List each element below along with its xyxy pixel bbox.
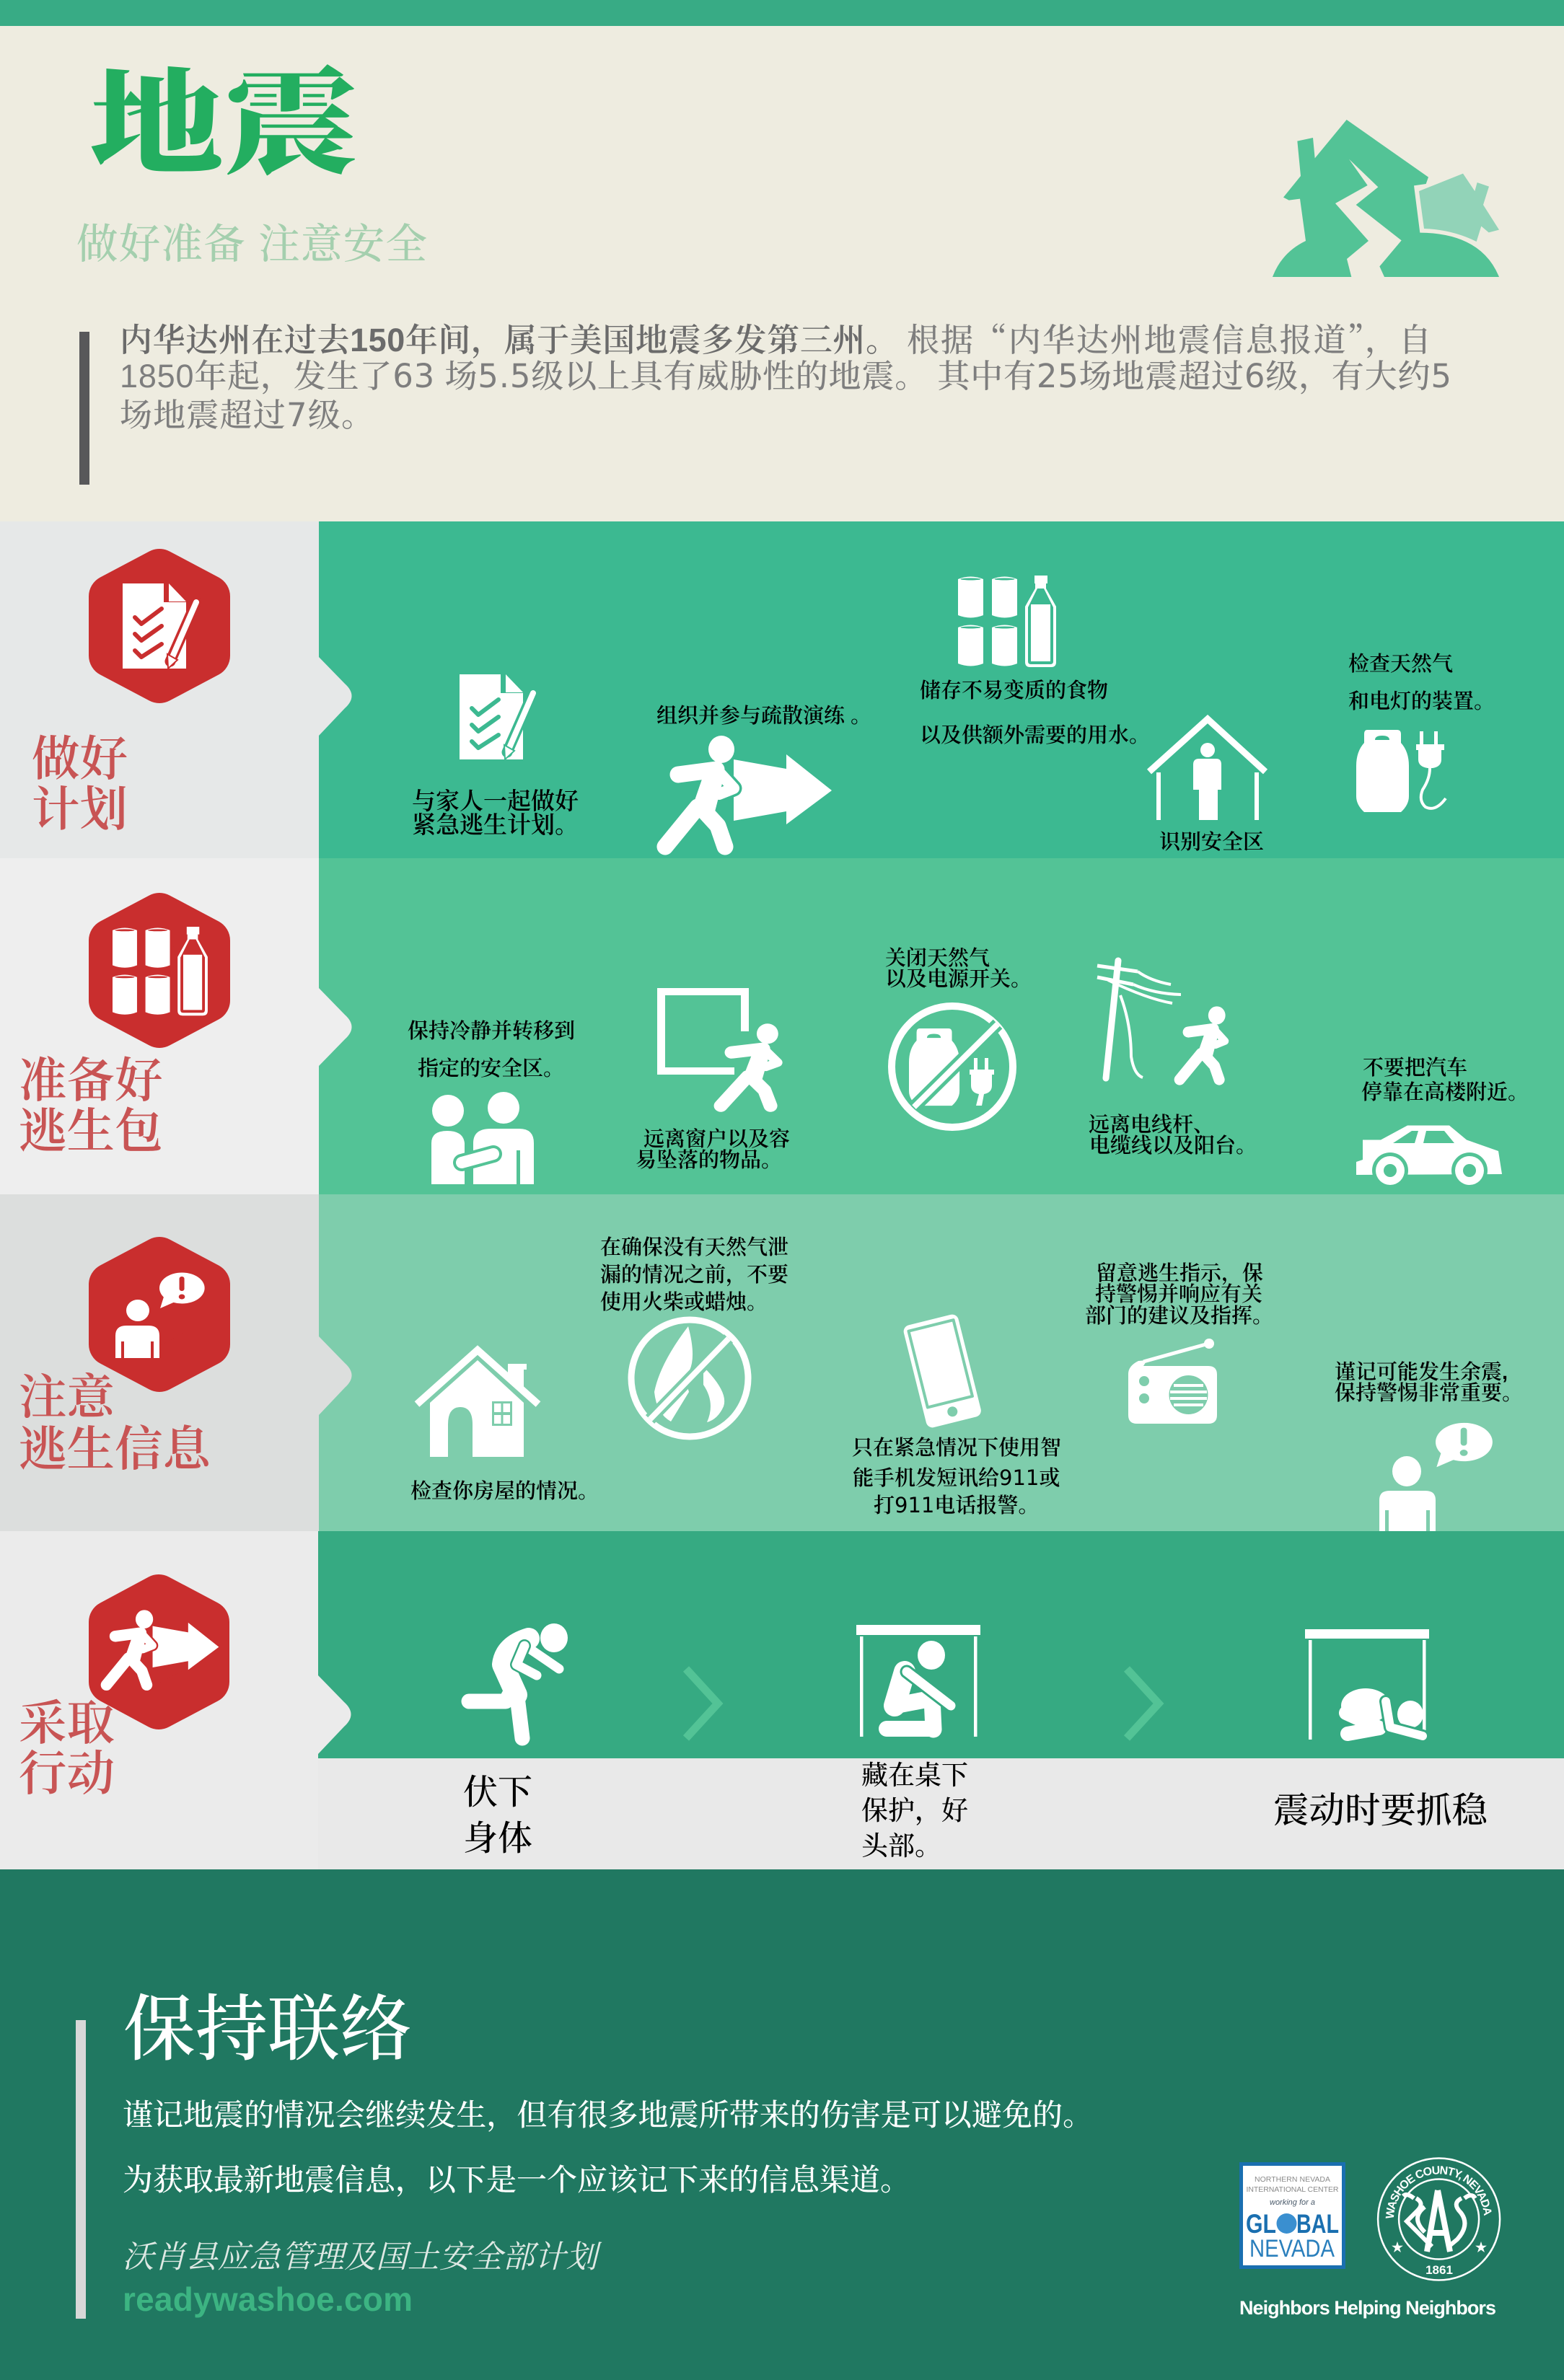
tagline: Neighbors Helping Neighbors [1239,2297,1496,2319]
heading: make a plan: 计划 [32,783,128,837]
icon: car [1356,1125,1502,1189]
icon: runner with arrow [665,736,832,847]
text: windows: 远离窗户以及容 [643,1127,790,1151]
icon: cans and bottle [958,576,1056,667]
panel background right [319,858,1564,1194]
notch [319,1336,352,1415]
panel: stay in touch footer [0,1869,1564,2380]
arrow: chevron [1127,1669,1159,1738]
heading: take action [19,1697,115,1801]
text: no matches: 漏的情况之前，不要 [600,1263,788,1287]
text: car parking: 不要把汽车 [1363,1056,1467,1080]
title: 地震 [89,60,358,189]
logo: washoe county seal: ★ [1391,2241,1404,2255]
caption strip [318,1758,1564,1869]
text: shut off gas: 关闭天然气 [885,946,990,970]
text: shut off gas: 以及电源开关。 [885,967,1032,991]
text: food and water: 储存不易变质的食物 [920,679,1108,702]
text: follow instructions: 持警惕并响应有关 [1095,1282,1262,1306]
text: food and water [920,679,1150,747]
text: shut off gas [885,946,1032,991]
heading: take action: 采取 [19,1697,115,1750]
heading: stay informed: 逃生信息 [19,1423,212,1476]
icon: utility pole and runner [1097,961,1226,1080]
icon: smartphone [902,1313,983,1429]
logo: global nevada: working for a [1270,2198,1315,2207]
intro paragraph: 内华达州在过去150年间，属于美国地震多发第三州。 [120,322,898,358]
intro accent bar [79,332,89,485]
text: power lines [1089,1113,1257,1158]
text: program: 沃肖县应急管理及国土安全部计划 [123,2240,602,2275]
text: stay calm: 指定的安全区。 [418,1057,564,1080]
text: power lines: 远离电线杆、 [1089,1113,1214,1137]
text: aftershocks: 保持警惕非常重要。 [1335,1381,1523,1405]
heading: stay informed: 注意 [19,1371,115,1424]
icon: cover under table [856,1625,980,1737]
panel: take action [0,1531,1564,1869]
icon: person with alert bubble [1379,1423,1493,1531]
heading: stay in touch: 保持联络 [123,1989,412,2070]
panel: prepare a kit [0,858,1564,1194]
heading: make a plan [32,733,128,837]
arrow: chevron [686,1669,718,1738]
logo: global nevada [1239,2162,1345,2269]
heading: prepare a kit: 逃生包 [19,1105,163,1158]
heading: stay informed [19,1371,212,1476]
heading: take action: 行动 [19,1747,115,1801]
panel background right [319,521,1564,858]
text: follow instructions [1085,1261,1273,1328]
text: check home: 检查你房屋的情况。 [410,1479,599,1503]
icon: hold on under table [1305,1629,1429,1740]
text: use smartphone: 只在紧急情况下使用智 [852,1436,1061,1460]
subtitle: 做好准备 注意安全 [76,221,427,268]
text: hold on: 震动时要抓稳 [1273,1791,1489,1830]
link: readywashoe: readywashoe.com [123,2280,413,2318]
text: cover: 藏在桌下 [861,1760,968,1790]
icon: safe zone house [1149,719,1265,820]
heading: make a plan: 做好 [32,733,128,786]
text: no matches [600,1235,788,1314]
icon: hexagon plan [110,570,208,682]
icon: hexagon person [110,1259,208,1370]
panel background left [0,858,319,1194]
heading: prepare a kit [19,1054,163,1158]
notch [319,657,352,736]
text: car parking: 停靠在高楼附近。 [1361,1080,1529,1104]
text: damage avoidable: 谨记地震的情况会继续发生，但有很多地震所带来的伤害是可以避免的。 [123,2098,1093,2133]
text: cover: 头部。 [861,1831,941,1861]
icon: cracked house [1273,120,1499,277]
icon: hexagon runner [106,1596,219,1708]
intro paragraph [120,314,1451,434]
icon: checklist [460,674,533,759]
logo: washoe county seal [1376,2157,1501,2281]
panel background left [0,1194,319,1531]
icon: drop [469,1623,568,1738]
text: safe zone: 识别安全区 [1159,830,1264,854]
text: stay calm: 保持冷静并转移到 [408,1019,575,1043]
icon: house [417,1350,538,1457]
text: drills: 组织并参与疏散演练 。 [656,704,871,728]
logo: global nevada: BAL [1296,2209,1339,2239]
text: power lines: 电缆线以及阳台。 [1089,1134,1257,1158]
logo: global nevada: GL [1246,2209,1276,2239]
text: cover: 保护，好 [861,1796,968,1825]
text: plan with family [412,788,579,838]
text: gas and lights: 和电灯的装置。 [1348,689,1495,713]
text: drop: 身体 [463,1820,532,1858]
text: windows: 易坠落的物品。 [636,1148,782,1172]
panel background left [0,1531,319,1869]
text: follow instructions: 部门的建议及指挥。 [1085,1303,1273,1328]
footer accent bar [76,2020,86,2319]
text: drop [463,1773,532,1858]
logo: global nevada: NEVADA [1249,2235,1335,2262]
logo: global nevada: INTERNATIONAL CENTER [1247,2185,1339,2194]
panel: make a plan [0,521,1564,858]
panel background right [319,1194,1564,1531]
panel background left [0,521,319,858]
text: cover [861,1760,968,1861]
text: windows [636,1127,790,1172]
text: aftershocks: 谨记可能发生余震, [1335,1360,1508,1384]
notch [319,988,352,1066]
text: follow instructions: 留意逃生指示，保 [1096,1261,1263,1285]
text: aftershocks [1335,1360,1523,1405]
heading: prepare a kit: 准备好 [19,1054,163,1108]
text: gas and lights [1348,652,1495,713]
panel background right [318,1531,1564,1758]
text: plan with family: 紧急逃生计划。 [412,811,579,838]
logo: washoe county seal: ★ [1475,2241,1488,2255]
text: food and water: 以及供额外需要的用水。 [920,723,1150,747]
text: use smartphone: 打911电话报警。 [874,1493,1039,1517]
logo: washoe county seal: WASHOE COUNTY, NEVADA [1385,2166,1492,2218]
icon: window and runner [657,988,778,1106]
logo: global nevada: NORTHERN NEVADA [1255,2175,1330,2184]
icon: gas tank and plug [1356,730,1446,812]
icon: radio [1128,1339,1217,1424]
intro paragraph: 根据“内华达州地震信息报道”，自 [907,314,1431,361]
icon: two people [431,1092,534,1184]
text: stay calm [408,1019,575,1080]
text: sources: 为获取最新地震信息，以下是一个应该记下来的信息渠道。 [123,2163,910,2198]
text: drop: 伏下 [463,1773,532,1812]
icon: no gas [892,1006,1013,1127]
text: gas and lights: 检查天然气 [1348,652,1453,676]
text: no matches: 使用火柴或蜡烛。 [600,1290,768,1314]
text: plan with family: 与家人一起做好 [412,788,579,814]
text: use smartphone [852,1436,1061,1517]
text: car parking [1361,1056,1529,1104]
text: no matches: 在确保没有天然气泄 [600,1235,788,1259]
logo: washoe county seal: 1861 [1425,2263,1453,2277]
icon: hexagon kit [110,914,208,1026]
panel: stay informed [0,1194,1564,1531]
footer background [0,1869,1564,2380]
notch [318,1675,351,1754]
intro paragraph: 1850年起，发生了63 场5.5级以上具有威胁性的地震。 其中有25场地震超过6级，有大约5 [120,357,1451,395]
icon: no flame [631,1320,748,1437]
intro paragraph: 场地震超过7级。 [120,396,374,434]
text: use smartphone: 能手机发短讯给911或 [853,1466,1060,1490]
top bar [0,0,1564,26]
